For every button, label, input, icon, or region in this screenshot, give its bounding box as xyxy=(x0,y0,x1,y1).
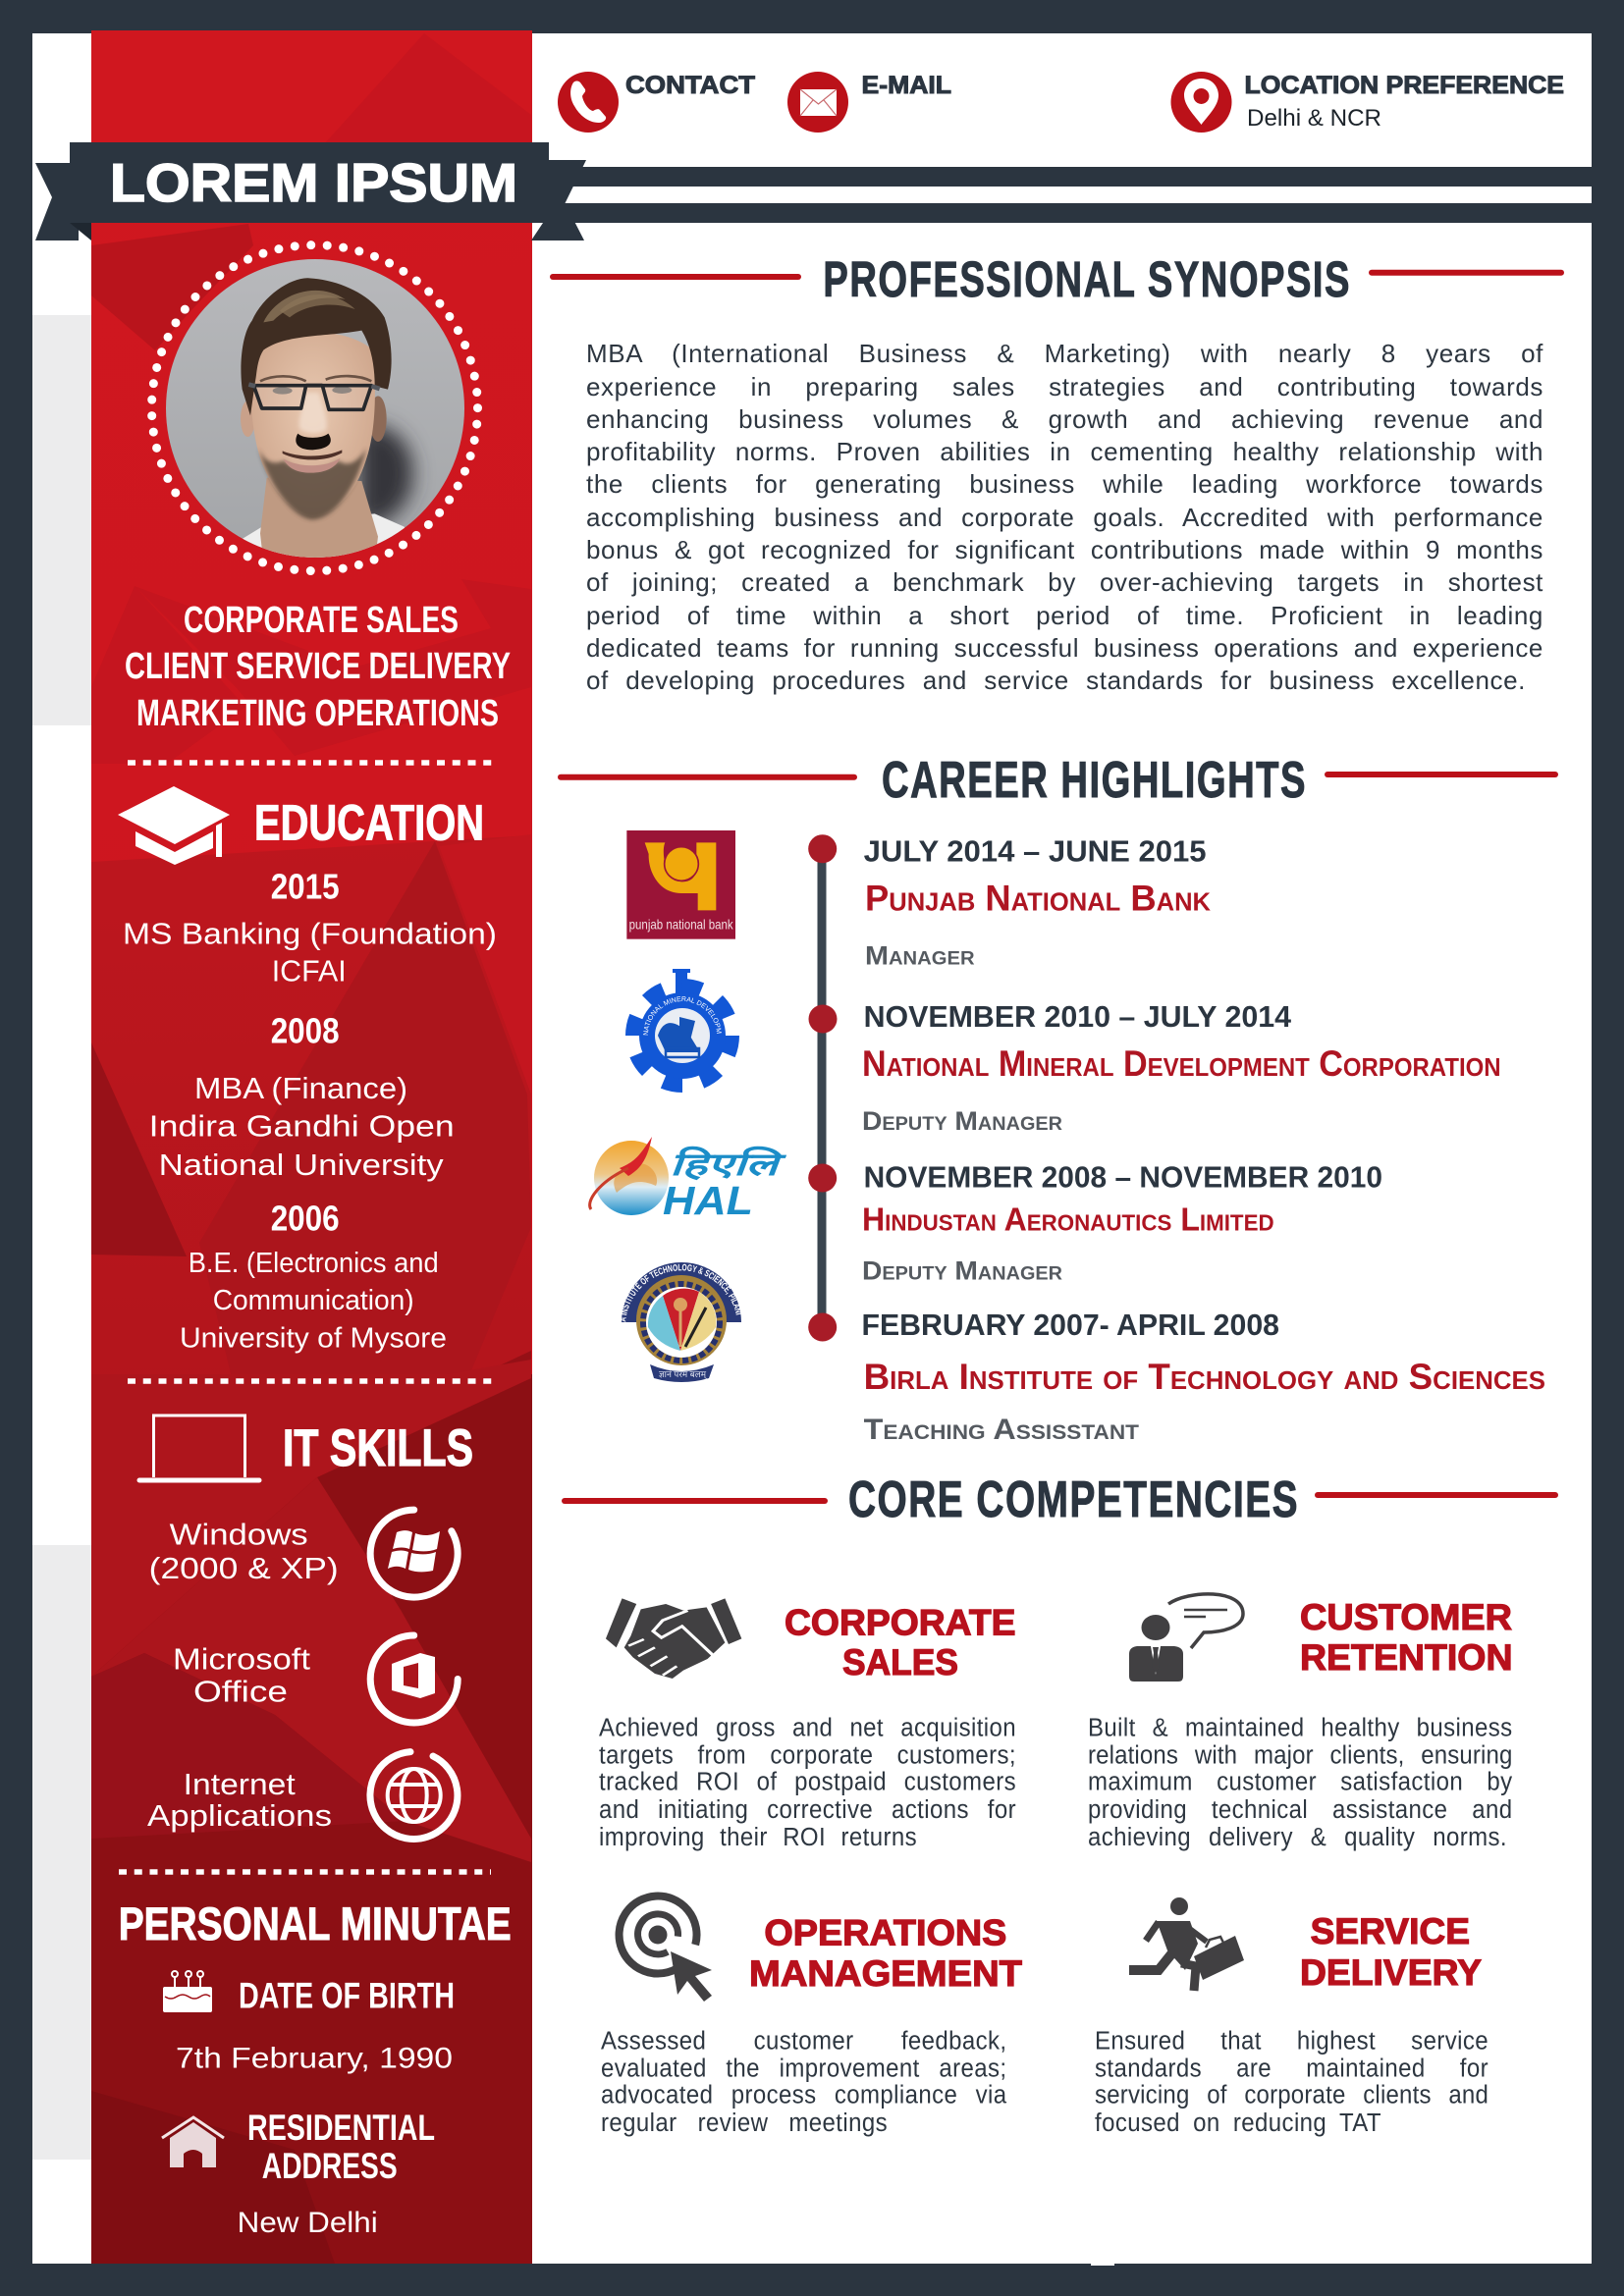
banner xyxy=(35,142,586,240)
icon: laptop xyxy=(139,1415,259,1480)
skill: windows: Windows xyxy=(170,1518,308,1552)
education entries xyxy=(123,866,497,1355)
it skills section xyxy=(139,1415,473,1839)
skill: windows: (2000 & XP) xyxy=(149,1551,339,1585)
residential address xyxy=(247,2108,435,2186)
icon: envelope xyxy=(787,72,848,133)
skill: internet: Applications xyxy=(147,1798,332,1833)
timeline xyxy=(808,834,837,1341)
text block: professional synopsis: bonus & got recognized for significant contributions made within 9 months xyxy=(586,535,1543,564)
education entries: MBA (Finance) xyxy=(194,1071,407,1105)
skill: office: Office xyxy=(193,1675,288,1708)
logo: bits: ज्ञानं परमं बलम् xyxy=(659,1369,708,1380)
text block: professional synopsis: profitability norms. Proven abilities in cementing healthy relationship with xyxy=(586,437,1543,466)
contact header: Delhi & NCR xyxy=(1247,105,1381,132)
career entry: bits: Teaching Assisstant xyxy=(864,1414,1139,1446)
text block: professional synopsis: of joining; created a benchmark by over-achieving targets in shortest xyxy=(586,567,1543,597)
text block: professional synopsis: of developing procedures and service standards for business excellence. xyxy=(586,666,1526,695)
education section xyxy=(118,786,497,1355)
sidebar roles: MARKETING OPERATIONS xyxy=(136,693,499,734)
competency title: service delivery: DELIVERY xyxy=(1300,1952,1482,1993)
text block: professional synopsis: experience in preparing sales strategies and contributing towards xyxy=(586,372,1543,401)
email label: E-MAIL xyxy=(862,72,951,99)
competency title: corporate sales xyxy=(785,1603,1015,1682)
residential address: RESIDENTIAL xyxy=(247,2108,435,2148)
skill: windows xyxy=(149,1510,458,1597)
competency title: customer retention: CUSTOMER xyxy=(1300,1597,1512,1637)
competency title: service delivery: SERVICE xyxy=(1311,1911,1470,1951)
icon: handshake xyxy=(606,1598,741,1679)
logo: bits: BIRLA INSTITUTE OF TECHNOLOGY & SCIENCE, PILANI xyxy=(622,1264,740,1322)
icon: cake xyxy=(163,1971,212,2012)
personal minutae section xyxy=(119,1897,512,2239)
text block: operations management xyxy=(601,2028,1007,2137)
career entry: nmdc xyxy=(862,999,1501,1136)
career entry: nmdc: NOVEMBER 2010 – JULY 2014 xyxy=(864,999,1292,1034)
location label: LOCATION PREFERENCE xyxy=(1245,72,1564,99)
skill: internet: Internet xyxy=(184,1767,296,1801)
personal minutae section: 7th February, 1990 xyxy=(176,2043,453,2075)
logo: hal: HAL xyxy=(663,1178,753,1223)
logo: punjab national bank xyxy=(626,830,735,939)
education entries: University of Mysore xyxy=(180,1323,447,1355)
education entries: Indira Gandhi Open xyxy=(149,1109,455,1144)
title: LOREM IPSUM xyxy=(110,152,517,213)
career entry: hal: NOVEMBER 2008 – NOVEMBER 2010 xyxy=(864,1159,1382,1194)
sidebar roles xyxy=(125,600,511,734)
heading: education: EDUCATION xyxy=(254,795,484,850)
logo: bits xyxy=(622,1262,741,1382)
competency title: corporate sales: SALES xyxy=(842,1642,958,1682)
icon: phone xyxy=(558,72,619,133)
career entry: punjab national bank: JULY 2014 – JUNE 2015 xyxy=(864,834,1207,869)
skill: office xyxy=(173,1635,458,1723)
education entries: 2006 xyxy=(271,1198,340,1239)
text block: corporate sales xyxy=(599,1715,1016,1851)
career entry: punjab national bank: Punjab National Bank xyxy=(865,878,1211,919)
heading: professional synopsis: PROFESSIONAL SYNOPSIS xyxy=(823,251,1351,307)
panel: red sidebar background xyxy=(91,30,532,2264)
date of birth: DATE OF BIRTH xyxy=(239,1975,455,2016)
text block: professional synopsis: dedicated teams for running successful business operations and experience xyxy=(586,633,1543,663)
skill: internet xyxy=(147,1752,458,1839)
text block: customer retention xyxy=(1088,1715,1512,1851)
education entries: MS Banking (Foundation) xyxy=(123,917,497,951)
education entries: ICFAI xyxy=(272,954,347,988)
contact label: CONTACT xyxy=(625,72,755,99)
text block: professional synopsis: accomplishing business and corporate goals. Accredited with performance xyxy=(586,503,1543,532)
sidebar roles: CORPORATE SALES xyxy=(184,600,459,641)
logo: hal xyxy=(590,1137,786,1223)
competency title: customer retention: RETENTION xyxy=(1300,1637,1512,1678)
education entries: Communication) xyxy=(213,1285,414,1316)
text block: service delivery xyxy=(1095,2028,1489,2137)
career entry: nmdc: Deputy Manager xyxy=(862,1106,1062,1136)
competency title: customer retention xyxy=(1300,1597,1512,1678)
logo: national mineral development corporation: NATIONAL MINERAL DEVELOPMENT CORP xyxy=(643,996,722,1035)
text block: professional synopsis: MBA (International Business & Marketing) with nearly 8 years of xyxy=(586,339,1543,368)
photo xyxy=(151,245,477,571)
text block: professional synopsis: the clients for generating business while leading workforce towards xyxy=(586,469,1543,499)
heading: it skills: IT SKILLS xyxy=(283,1419,473,1477)
logo: punjab national bank: punjab national bank xyxy=(629,916,733,932)
sidebar roles: CLIENT SERVICE DELIVERY xyxy=(125,646,511,687)
personal minutae section: New Delhi xyxy=(238,2207,378,2239)
logo: hal: हिएलि xyxy=(670,1146,786,1182)
competency title: operations management xyxy=(749,1913,1022,1994)
heading: career highlights: CAREER HIGHLIGHTS xyxy=(882,752,1307,809)
icon: running man with briefcase xyxy=(1129,1897,1244,1991)
education entries: 2015 xyxy=(271,866,340,907)
icon: house xyxy=(162,2117,224,2167)
dotted ring xyxy=(151,245,477,571)
education entries: B.E. (Electronics and xyxy=(189,1248,439,1279)
text block: professional synopsis xyxy=(586,339,1543,695)
icon: location pin xyxy=(1170,72,1231,133)
career entry: punjab national bank: Manager xyxy=(865,941,975,971)
career entry: bits: FEBRUARY 2007- APRIL 2008 xyxy=(862,1308,1279,1342)
education entries: 2008 xyxy=(271,1010,340,1050)
icon: customer person and speech bubble xyxy=(1129,1594,1243,1682)
career entry: bits: Birla Institute of Technology and Sciences xyxy=(864,1357,1545,1397)
career entry: hal: Hindustan Aeronautics Limited xyxy=(862,1201,1274,1238)
education entries: National University xyxy=(159,1148,444,1182)
icon: target and cursor xyxy=(620,1896,712,2002)
competency title: operations management: MANAGEMENT xyxy=(749,1953,1022,1994)
logo: national mineral development corporation xyxy=(625,969,739,1093)
residential address: ADDRESS xyxy=(262,2146,398,2186)
competency title: service delivery xyxy=(1300,1911,1482,1993)
career entry: hal xyxy=(862,1159,1382,1286)
icon: graduation cap xyxy=(118,786,230,865)
grey side bands xyxy=(32,315,91,2160)
heading: personal minutae: PERSONAL MINUTAE xyxy=(119,1897,512,1949)
skill: office: Microsoft xyxy=(173,1642,310,1677)
header bars xyxy=(565,167,1592,223)
text block: professional synopsis: period of time within a short period of time. Proficient in leading xyxy=(586,601,1543,630)
contact header xyxy=(558,72,1564,133)
career entry: hal: Deputy Manager xyxy=(862,1256,1062,1286)
career entry: punjab national bank xyxy=(864,834,1211,971)
competency title: operations management: OPERATIONS xyxy=(764,1913,1006,1953)
career entry: bits xyxy=(862,1308,1545,1446)
text block: professional synopsis: enhancing business volumes & growth and achieving revenue and xyxy=(586,404,1543,434)
heading: core competencies: CORE COMPETENCIES xyxy=(848,1471,1299,1528)
career entry: nmdc: National Mineral Development Corporation xyxy=(862,1043,1501,1084)
competency title: corporate sales: CORPORATE xyxy=(785,1603,1015,1643)
